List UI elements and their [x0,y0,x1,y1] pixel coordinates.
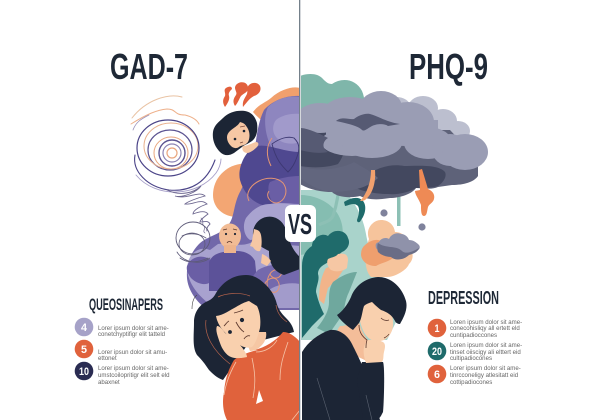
item: 10: Lorer ipsum dolor sit ame- [98,365,169,372]
orange blob top [253,87,299,120]
darkest folds [300,128,346,167]
person: profile woman with dark hair [250,217,300,275]
spiral scribble: large swirl [131,96,221,262]
item: 1: conecohisliqy all ertett eld [450,325,520,332]
body lines [317,378,372,420]
item: 5: 5 [81,344,87,356]
infographic: GAD-7 vs PHQ-9 [74,0,522,420]
VS badge: VS [288,209,312,241]
teal blob top [300,74,364,112]
storm cloud [296,91,488,216]
light main cloud [296,91,488,170]
dark wire outline [272,137,299,172]
item: 10 [75,362,169,386]
item: 4: 4 [81,322,88,334]
eyes and mouth [243,130,245,132]
illustration: anxiety side [187,82,300,420]
small cloud [376,233,420,259]
drops [380,209,388,217]
heading: DEPRESSION [428,288,499,308]
back light lobes [398,96,470,136]
hair [194,275,294,380]
item: 10: abaxnet [98,379,120,386]
mint body [300,190,397,340]
sweater [223,332,300,420]
darker mint arc [300,195,343,255]
item: 20 [428,342,522,362]
item: 4: conetchyptifigr elit tatteld [98,331,165,338]
item: 6: tinrcconeligy atlesitatt eid [450,372,518,379]
hand [216,326,247,358]
item: 10: umstcoilopritigr elit selt eld [98,372,169,379]
item: 1: 1 [434,323,440,335]
item: 20: tinset oiiscigy ali elttert eid [450,349,521,356]
illustration: depression side [296,74,488,420]
icon: orange flames [223,82,261,107]
item: 6: 6 [434,369,440,381]
item: 4 [75,318,169,338]
body [302,330,380,420]
orange bolts [360,170,375,201]
centre divider line [299,0,300,420]
hair [337,277,407,330]
item: 6: Lorer ipsum dolor sit ame- [450,365,521,372]
teal hair figure [302,231,357,338]
drip lines [334,195,340,211]
item: 5: Lorer ipsun dolor sit amu- [98,349,167,356]
eyes [240,318,244,322]
item: 1: cuntipadioccones [450,332,497,339]
item: 20: cultipadiocones [450,355,492,362]
right panel: DEPRESSION [428,288,522,386]
brows and mouth [224,310,250,339]
item: 6: cottipadiocones [450,379,492,386]
item: 1 [428,319,522,339]
item: 10: 10 [79,366,89,378]
sweater lines [224,340,300,420]
title: GAD-7: GAD-7 [110,46,188,87]
dark bottom band [300,130,478,199]
face [358,295,393,341]
heading: QUEOSINAPERS [89,295,163,314]
item: 1: Loren ipsum dolor sit ame- [450,319,522,326]
person: worried person top [213,111,258,155]
left panel: QUEOSINAPERS [75,295,169,386]
purple mass [187,96,300,310]
hand [242,142,258,153]
hair highlights [206,293,287,364]
item: 20: 20 [432,346,442,358]
dark fold [336,114,400,131]
lower lobes [187,242,300,306]
tangled tail [167,186,210,231]
person: dark hair head down [302,277,407,420]
face [216,301,260,348]
item: 5: ettonet [98,355,117,362]
orange squiggle lines [248,138,286,298]
arm [357,362,384,420]
hand [364,340,385,363]
neck [248,332,266,351]
item: 20: Loren ipsum dolor sit ame- [450,342,522,349]
teal hook [344,198,365,222]
orange blob mid [213,164,242,216]
person: bald figure [219,224,241,253]
face [227,122,250,148]
title: PHQ-9: PHQ-9 [409,46,488,87]
neck [336,322,371,362]
item: 6 [428,365,521,386]
white gap [256,390,263,404]
item: 5 [75,340,167,362]
closed eye and mouth [359,318,389,348]
peach blobs [319,220,413,304]
VS badge [285,205,316,242]
hair [213,111,257,155]
item: 4: Lorer ipsum dolor sit ame- [98,325,169,332]
lower scribble [176,222,210,254]
woman: head in hand [192,275,300,420]
